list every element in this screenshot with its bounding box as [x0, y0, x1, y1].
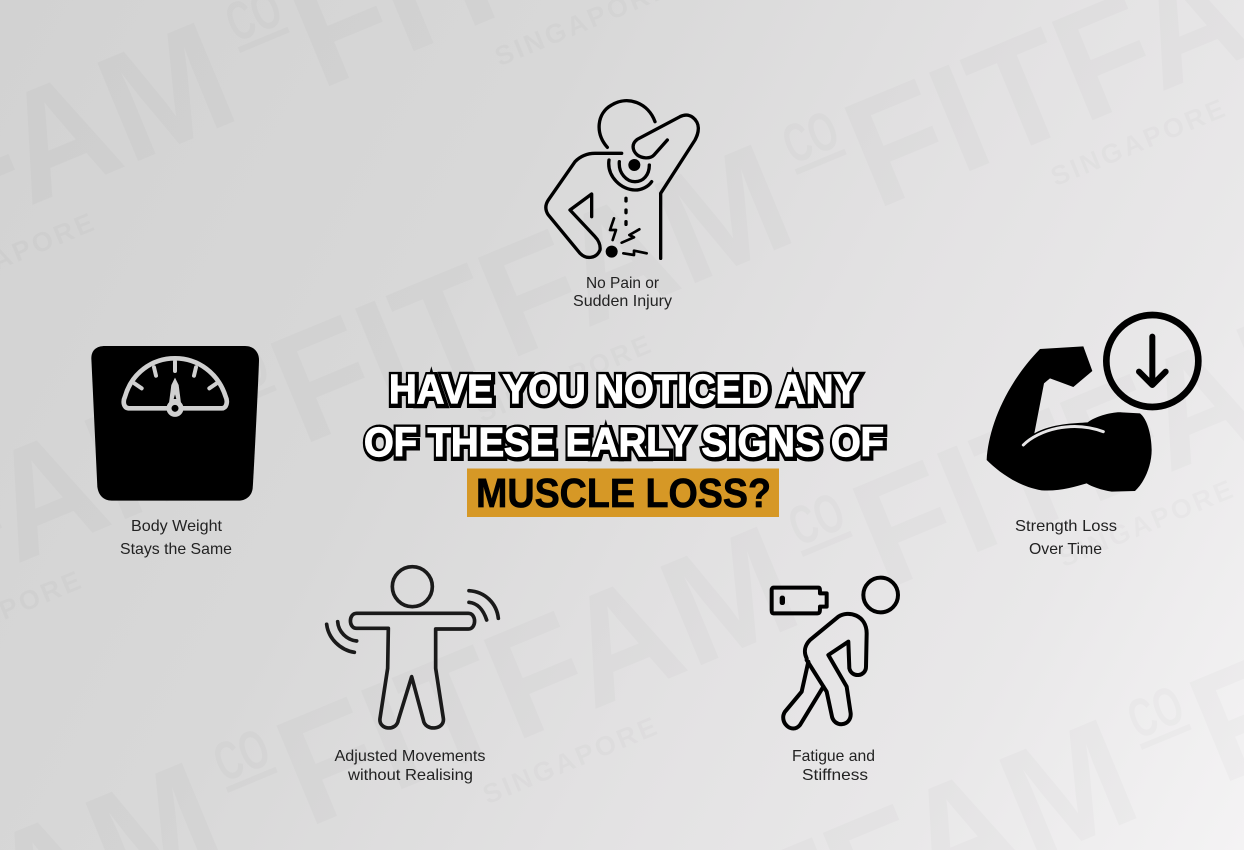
icon: arms out figure with motion lines — [327, 567, 498, 728]
background watermark pattern: CO — [1119, 673, 1192, 751]
label: strength loss over time — [1015, 518, 1117, 558]
background watermark pattern: CO — [204, 334, 277, 412]
title: HAVE YOU NOTICED ANY — [389, 366, 859, 412]
background watermark pattern: CO — [205, 716, 278, 794]
label: adjusted movements without realising: without Realising — [347, 767, 473, 784]
label: body weight stays the same: Body Weight — [131, 518, 223, 535]
background watermark pattern: SINGAPORE — [1054, 474, 1237, 573]
title: OF THESE EARLY SIGNS OF — [365, 420, 885, 466]
label: body weight stays the same — [120, 518, 232, 558]
label: adjusted movements without realising — [334, 748, 486, 784]
label: no pain or sudden injury — [573, 275, 672, 310]
background watermark pattern: CO — [780, 480, 853, 558]
background watermark pattern: FITFAM — [254, 492, 820, 850]
background watermark pattern: SINGAPORE — [478, 711, 661, 810]
background watermark pattern: CO — [774, 98, 847, 176]
icon: tired figure with low battery — [772, 578, 898, 729]
icon: flexed arm with down arrow — [987, 315, 1198, 492]
icon: back and neck pain figure — [546, 101, 698, 258]
label: fatigue and stiffness: Stiffness — [802, 767, 868, 784]
label: no pain or sudden injury: No Pain or — [586, 275, 660, 292]
background watermark pattern: FITFAM — [248, 110, 814, 476]
title: HAVE YOU NOTICED ANY — [390, 367, 860, 413]
icon: weighing scale — [91, 346, 259, 501]
label: body weight stays the same: Stays the Same — [120, 541, 232, 558]
label: fatigue and stiffness: Fatigue and — [792, 748, 875, 765]
label: adjusted movements without realising: Adjusted Movements — [334, 748, 486, 765]
highlighted heading: muscle loss: MUSCLE LOSS? — [476, 470, 771, 516]
label: strength loss over time: Over Time — [1029, 541, 1102, 558]
title — [364, 366, 885, 466]
background watermark pattern: SINGAPORE — [472, 329, 655, 428]
title: OF THESE EARLY SIGNS OF — [364, 419, 884, 465]
label: fatigue and stiffness — [792, 748, 875, 784]
label: no pain or sudden injury: Sudden Injury — [573, 293, 672, 310]
label: strength loss over time: Strength Loss — [1015, 518, 1117, 535]
background watermark pattern: SINGAPORE — [1046, 93, 1229, 192]
